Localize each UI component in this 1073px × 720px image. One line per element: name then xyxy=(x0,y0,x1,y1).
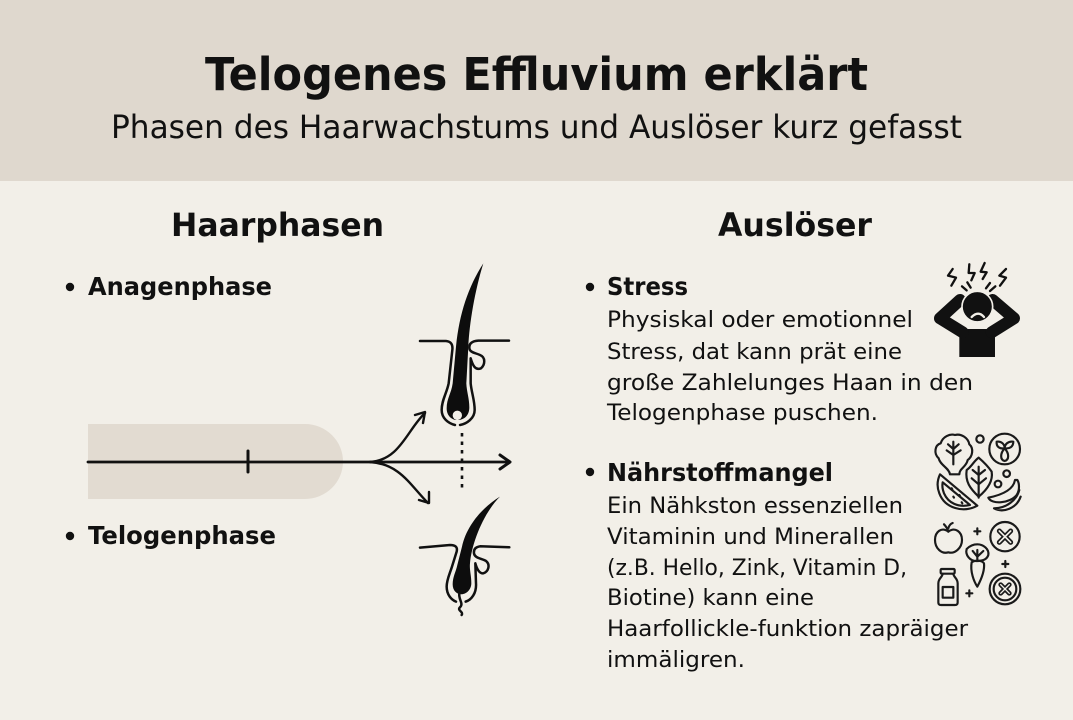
icon: apple xyxy=(935,523,962,553)
text block: Nährstoffmangel: Nährstoffmangel xyxy=(607,458,833,487)
text block: Nährstoffmangel: immäligren. xyxy=(607,648,745,673)
icon: small dot xyxy=(976,435,984,443)
icon: plus xyxy=(1002,561,1008,567)
icon: stressed person xyxy=(940,263,1014,357)
icon: spinach leaf xyxy=(966,458,992,498)
panel: Auslöser xyxy=(586,206,1021,673)
icon: anagen hair follicle xyxy=(420,263,509,425)
timeline arrow xyxy=(88,451,510,472)
icon: banana xyxy=(988,480,1021,510)
icon: telogen hair follicle xyxy=(420,497,509,615)
heading: Haarphasen: Haarphasen xyxy=(171,206,384,244)
icon: berries xyxy=(995,470,1010,487)
label: Telogenphase: Telogenphase xyxy=(88,521,276,550)
icon: lettuce xyxy=(935,435,972,474)
icon: plus xyxy=(974,528,980,534)
arrow: branch to Telogen xyxy=(370,462,429,503)
label: Anagenphase: Anagenphase xyxy=(88,272,272,301)
title: Telogenes Effluvium erklärt xyxy=(205,48,868,101)
text block: Stress: Telogenphase puschen. xyxy=(606,401,878,426)
icon: carrot xyxy=(966,544,988,587)
dashed phase marker xyxy=(461,433,463,491)
text block: Nährstoffmangel: (z.B. Hello, Zink, Vitamin D, xyxy=(607,556,907,581)
icon: watermelon slice xyxy=(938,474,977,509)
text block: Nährstoffmangel: Haarfollickle-funktion zapräiger xyxy=(607,617,969,642)
text block: Nährstoffmangel: Vitaminin und Minerallen xyxy=(607,525,894,550)
text block: Stress xyxy=(586,272,973,426)
arrow: branch to Anagen xyxy=(370,412,425,462)
text block: Stress: Physiskal oder emotionnel xyxy=(607,308,913,333)
text block: Stress: große Zahlelunges Haan in den xyxy=(607,371,973,396)
icon: seedling in circle xyxy=(989,434,1020,464)
panel: Haarphasen xyxy=(66,206,510,615)
icon: crossed circle xyxy=(990,522,1020,551)
icon: supplement bottle xyxy=(938,569,958,605)
subtitle: Phasen des Haarwachstums und Auslöser kurz gefasst xyxy=(111,108,962,146)
text block: Nährstoffmangel: Biotine) kann eine xyxy=(607,586,814,611)
header band xyxy=(0,0,1073,181)
text block: Stress: Stress, dat kann prät eine xyxy=(607,340,902,365)
icon: crossed button xyxy=(990,574,1020,604)
text block: Nährstoffmangel: Ein Nähkston essenziellen xyxy=(607,494,903,519)
timeline band xyxy=(88,424,343,499)
text block: Stress: Stress xyxy=(607,272,688,301)
heading: Auslöser: Auslöser xyxy=(718,206,872,244)
icon: nutrition group xyxy=(935,434,1021,605)
text block: Nährstoffmangel xyxy=(586,458,969,673)
icon: plus xyxy=(966,590,972,596)
